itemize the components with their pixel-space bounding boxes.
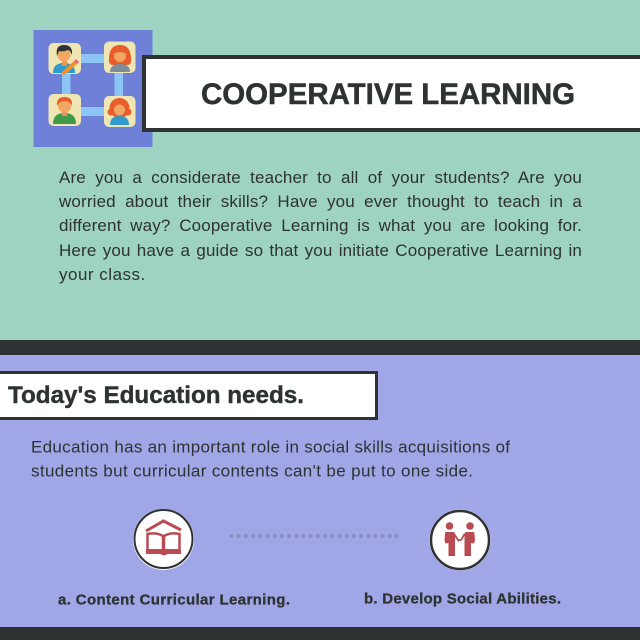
section paragraph [31, 438, 510, 480]
title banner [142, 55, 640, 132]
student: curly-haired girl [104, 96, 136, 127]
dotted connector [230, 534, 398, 538]
caption b: b. Develop Social Abilities. [364, 590, 561, 608]
student: woman with red hair [104, 42, 136, 73]
dark divider band [0, 340, 640, 356]
title: COOPERATIVE LEARNING [200, 78, 574, 110]
lower section background [0, 355, 640, 627]
section heading: Today's Education needs. [8, 382, 304, 408]
intro paragraph: different way? Cooperative Learning is what you are looking for. [59, 216, 582, 235]
student: red-haired boy in green [48, 94, 81, 126]
intro paragraph: Are you a considerate teacher to all of your students? Are you [59, 168, 582, 186]
bottom dark band [0, 627, 640, 640]
student: boy with pencil [48, 43, 81, 75]
section heading banner [0, 371, 378, 420]
caption a: a. Content Curricular Learning. [58, 592, 290, 608]
section paragraph: Education has an important role in social skills acquisitions of [31, 438, 510, 456]
intro paragraph: Here you have a guide so that you initiate Cooperative Learning in [59, 241, 582, 260]
section paragraph: students but curricular contents can't be put to one side. [31, 462, 473, 480]
intro paragraph [59, 168, 582, 284]
icon: book and roof in a circle [133, 509, 194, 570]
icon: two people shaking hands in a circle [430, 510, 490, 570]
intro paragraph: your class. [59, 265, 146, 284]
intro paragraph: worried about their skills? Have you ever thought to teach in a [59, 192, 582, 211]
header illustration: four connected students [34, 30, 152, 147]
